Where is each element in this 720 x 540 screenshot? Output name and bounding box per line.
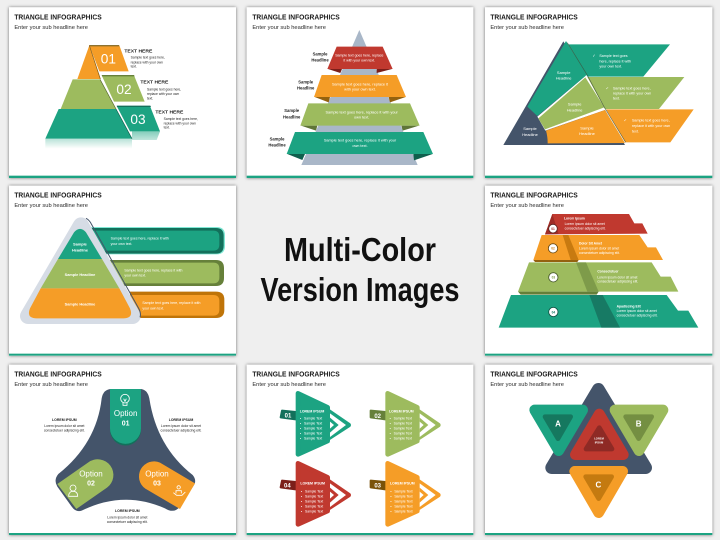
arrow 04: Sample Text (305, 504, 323, 508)
right banner green (587, 77, 684, 109)
arrow 01: • (300, 427, 302, 431)
label right: LOREM IPSUM (169, 418, 193, 422)
arrow 01: Sample Text (304, 427, 322, 431)
label right (161, 418, 202, 433)
arrow 04: Sample Text (305, 499, 323, 503)
panel: stacked pyramid 01-03 (9, 7, 236, 178)
dark edge (86, 218, 140, 317)
title: TRIANGLE INFOGRAPHICS (490, 193, 578, 200)
tier 01: 01 (101, 52, 116, 67)
bar orange (130, 292, 224, 318)
step teal (499, 295, 698, 328)
number badges: 01 (551, 227, 555, 231)
banner text orange: Sample text goes here, (632, 119, 670, 123)
side headlines: Sample (313, 51, 328, 56)
subtitle: Enter your sub headline here (490, 203, 564, 209)
segment labels (65, 243, 95, 306)
bar green (110, 260, 224, 286)
bar orange: Sample text goes here, replace it with (142, 301, 200, 305)
arrow 01: • (300, 432, 302, 436)
center heading: Version Images (260, 271, 460, 308)
step orange (533, 235, 663, 262)
label right: consectetuer adipiscing elit. (161, 429, 202, 433)
arrow 02: • (390, 432, 392, 436)
step green (518, 262, 678, 295)
arrow 03: • (390, 499, 392, 503)
tier 02 (61, 75, 145, 109)
arrow 02: 02 (374, 414, 382, 420)
text 03: TEXT HERE (155, 110, 184, 116)
bar teal (90, 227, 225, 254)
ribbon red: it with your own text. (344, 58, 375, 62)
segment headlines: Headline (556, 76, 572, 81)
text 01: replace with your own (131, 60, 163, 64)
title: TRIANGLE INFOGRAPHICS (490, 371, 578, 378)
arrow 04: • (301, 499, 303, 503)
side headlines: Sample (298, 79, 314, 84)
banner text green: Sample text goes here, (613, 86, 651, 90)
arrow 01: Sample Text (304, 422, 322, 426)
side headlines: Headline (311, 57, 329, 62)
bar green: your own text. (124, 274, 146, 278)
arrow 01: • (300, 437, 302, 441)
segment headlines: Headline (579, 131, 596, 136)
bar orange: your own text. (142, 306, 164, 310)
center heading (260, 231, 460, 308)
arrow 03: Sample Text (394, 499, 413, 503)
triangle A (535, 410, 583, 451)
arrow 02: • (390, 427, 392, 431)
option 01: 01 (122, 420, 130, 427)
text 03: text. (164, 126, 170, 130)
ribbon orange: with your own text. (344, 88, 376, 92)
arrow 03: • (390, 494, 392, 498)
arrow 01 (281, 393, 349, 454)
ribbon teal: own text. (352, 144, 368, 148)
center triangle: LOREM (594, 436, 605, 440)
bar green: Sample text goes here, replace it with (124, 268, 182, 272)
banner text teal: here, replace it with (599, 59, 631, 63)
banner text orange: replace it with your own (632, 124, 670, 128)
banner text green: text. (613, 97, 620, 101)
segment labels: Sample Headline (65, 302, 95, 306)
arrow 04: • (301, 494, 303, 498)
segment labels: Headline (72, 249, 88, 253)
ribbon green (300, 103, 420, 131)
title: TRIANGLE INFOGRAPHICS (252, 371, 340, 378)
text 01 (124, 48, 165, 69)
segment headlines: Sample (580, 125, 595, 130)
center heading: Multi-Color (284, 231, 436, 268)
arrow 02: Sample Text (394, 437, 412, 441)
step text green (597, 270, 638, 284)
ribbon green: own text. (354, 115, 369, 119)
tier 02: 02 (116, 82, 132, 97)
arrow 04: 04 (284, 483, 291, 489)
subtitle: Enter your sub headline here (14, 382, 88, 388)
text 02: replace with your own (147, 92, 179, 96)
option 02: 02 (87, 480, 95, 487)
segment headlines: Headline (522, 132, 539, 137)
arrow 04: Sample Text (305, 489, 323, 493)
subtitle: Enter your sub headline here (252, 382, 326, 388)
step text orange: consectetuer adipiscing elit. (579, 251, 620, 255)
arrow 03: Sample Text (394, 489, 413, 493)
label right: Lorem ipsum dolor sit amet (161, 424, 201, 428)
right banner orange (606, 109, 694, 142)
reflection (45, 131, 160, 149)
banner text green: ✓ (606, 85, 609, 90)
triangle C: C (595, 481, 601, 490)
side headlines: Headline (297, 86, 315, 91)
text 03: replace with your own (164, 121, 196, 125)
arrow 02 (371, 393, 438, 454)
ribbon orange (314, 75, 406, 102)
text 01: TEXT HERE (124, 48, 153, 54)
panel: three options (9, 365, 236, 535)
center triangle: IPSUM (595, 441, 604, 445)
banner text orange (624, 118, 670, 133)
banner text orange: text. (632, 129, 639, 133)
panel: arrow triangles (247, 365, 473, 535)
banner text green (606, 85, 651, 101)
arrow 04: Sample Text (305, 494, 323, 498)
option 01: Option (114, 409, 137, 418)
divider lines (567, 43, 626, 142)
ribbon teal: Sample text goes here, replace it with your (324, 139, 397, 143)
subtitle: Enter your sub headline here (252, 25, 326, 31)
number badges: 02 (551, 247, 555, 251)
option 03: 03 (153, 480, 161, 487)
panel: segmented triangle (485, 7, 712, 178)
arrow 03: • (390, 504, 392, 508)
arrow 02: • (390, 417, 392, 421)
banner text teal (592, 53, 631, 69)
arrow 02: • (390, 422, 392, 426)
step text green: consectetuer adipiscing elit. (597, 280, 638, 284)
tier 03: 03 (130, 112, 146, 127)
segment headlines (522, 70, 596, 137)
segment headlines: Headline (567, 107, 583, 112)
text 02 (140, 80, 181, 100)
side headlines: Headline (268, 143, 286, 148)
number badges: 03 (552, 276, 555, 280)
arrow 02: Sample Text (394, 417, 412, 421)
ribbon teal (287, 132, 433, 160)
arrow 01: LOREM IPSUM (300, 409, 324, 413)
arrow 03: 03 (374, 483, 382, 489)
arrow 01: 01 (285, 413, 292, 419)
title: TRIANGLE INFOGRAPHICS (14, 193, 102, 200)
option 02: Option (79, 469, 103, 478)
step text teal: Lorem ipsum dolor sit amet (617, 309, 657, 313)
ribbon green: Sample text goes here, replace it with your (325, 110, 399, 114)
step text orange: Lorem ipsum dolor sit amet (579, 247, 619, 251)
arrow 03 (371, 463, 438, 524)
label left: consectetuer adipiscing elit. (44, 429, 85, 433)
panel: stepped pyramid (485, 186, 712, 356)
segment teal (527, 41, 587, 116)
step text orange: Dolor Sit Amet (579, 242, 603, 246)
segment headlines: Sample (568, 102, 582, 107)
side headlines (268, 51, 329, 148)
title: TRIANGLE INFOGRAPHICS (490, 15, 578, 22)
ribbon red (327, 47, 393, 73)
bar teal: your own text. (111, 242, 132, 246)
arrow 04: • (301, 509, 303, 513)
text 02: Sample text goes here, (147, 87, 181, 91)
panel: ribbon pyramid (247, 7, 473, 178)
step text red: Lorem Ipsum (564, 216, 585, 220)
option 02 (57, 459, 113, 509)
text 01: text. (131, 65, 137, 69)
triangle B: B (636, 420, 642, 429)
label left: LOREM IPSUM (52, 418, 77, 422)
label left (44, 418, 85, 433)
banner text orange: ✓ (624, 118, 627, 123)
arrow 04: • (301, 504, 303, 508)
segment labels: Sample Headline (65, 273, 95, 277)
step text red: Lorem ipsum dolor sit amet (565, 222, 605, 226)
tier 01 (77, 45, 129, 79)
triangle C (575, 471, 623, 513)
arrow 03: • (390, 509, 392, 513)
step text green: Lorem ipsum dolor sit amet (597, 275, 638, 279)
text 02: text. (147, 96, 153, 100)
ribbon red: Sample text goes here, replace (335, 54, 384, 58)
arrow 01: Sample Text (304, 417, 322, 421)
option 03 (139, 461, 195, 509)
segment orange (29, 288, 131, 318)
arrow 03: Sample Text (394, 509, 413, 513)
dark triangle (503, 41, 625, 145)
arrow 02: Sample Text (394, 432, 412, 436)
subtitle: Enter your sub headline here (490, 25, 564, 31)
arrow 02: Sample Text (394, 422, 412, 426)
title: TRIANGLE INFOGRAPHICS (252, 15, 340, 22)
side headlines: Sample (270, 136, 285, 141)
step text orange (579, 242, 620, 255)
step text red (564, 216, 606, 231)
step text green: Consectetuer (597, 270, 619, 274)
side headlines: Sample (284, 108, 300, 113)
title: TRIANGLE INFOGRAPHICS (14, 371, 102, 378)
arrow 01: • (300, 422, 302, 426)
grey rounded triangle (28, 225, 133, 316)
triangle B (615, 410, 663, 451)
segment labels: Sample (73, 243, 87, 247)
label bottom: LOREM IPSUM (115, 509, 140, 513)
step red (545, 214, 648, 234)
arrow 03: • (390, 489, 392, 493)
text 03 (155, 110, 198, 130)
banner text teal: your own text. (599, 65, 622, 69)
bar teal: Sample text goes here, replace it with (111, 237, 169, 241)
segment green (538, 77, 604, 129)
label bottom (107, 509, 148, 524)
banner text teal: ✓ (592, 53, 596, 58)
arrow 02: LOREM IPSUM (389, 409, 414, 413)
text 03: Sample text goes here, (164, 117, 198, 121)
triangle A: A (555, 420, 561, 429)
side headlines: Headline (283, 114, 301, 119)
arrow 01: Sample Text (304, 432, 322, 436)
option 01 (110, 389, 141, 445)
ribbon orange: Sample text goes here, replace it (332, 82, 389, 86)
step text teal: Apadiscing Elit (617, 304, 642, 308)
banner text green: replace it with your own (613, 92, 651, 96)
segment headlines: Sample (523, 126, 538, 131)
panel: star of triangles (485, 365, 712, 535)
center triangle (575, 414, 623, 455)
step text teal: consectetuer adipiscing elit. (617, 314, 658, 318)
arrow 04: Sample Text (305, 509, 323, 513)
banner text teal: Sample text goes (599, 54, 628, 58)
subtitle: Enter your sub headline here (14, 25, 88, 31)
tier 03 (45, 106, 160, 139)
label bottom: consectetuer adipiscing elit. (107, 520, 148, 524)
arrow 03: Sample Text (394, 504, 413, 508)
number badges: 04 (552, 310, 555, 314)
segment green (41, 259, 119, 288)
arrow 01: • (300, 417, 302, 421)
option 03: Option (145, 469, 169, 478)
arrow 03: Sample Text (394, 494, 413, 498)
panel: rounded triangle with bars (9, 186, 236, 356)
subtitle: Enter your sub headline here (14, 203, 88, 209)
arrow 02: • (390, 437, 392, 441)
arrow 04: LOREM IPSUM (300, 482, 325, 486)
arrow 01: Sample Text (304, 437, 322, 441)
segment teal (58, 229, 102, 259)
arrow 04 (281, 463, 349, 524)
label left: Lorem ipsum dolor sit amet (44, 424, 84, 428)
grey pyramid (301, 30, 418, 165)
arrow 04: • (301, 489, 303, 493)
label bottom: Lorem ipsum dolor sit amet (107, 515, 147, 519)
step text teal (617, 304, 658, 318)
right banner teal (568, 44, 670, 77)
arrow 02: Sample Text (394, 427, 412, 431)
arrow 03: LOREM IPSUM (390, 482, 415, 486)
text 02: TEXT HERE (140, 80, 169, 86)
subtitle: Enter your sub headline here (490, 382, 564, 388)
number badges (548, 224, 558, 317)
segment headlines: Sample (557, 70, 571, 75)
dark three-lobed shape (56, 389, 195, 511)
text 01: Sample text goes here, (131, 56, 165, 60)
title: TRIANGLE INFOGRAPHICS (14, 15, 102, 22)
step text red: consectetuer adipiscing elit. (565, 227, 606, 231)
dark back triangle (552, 389, 646, 468)
segment orange (546, 110, 625, 143)
